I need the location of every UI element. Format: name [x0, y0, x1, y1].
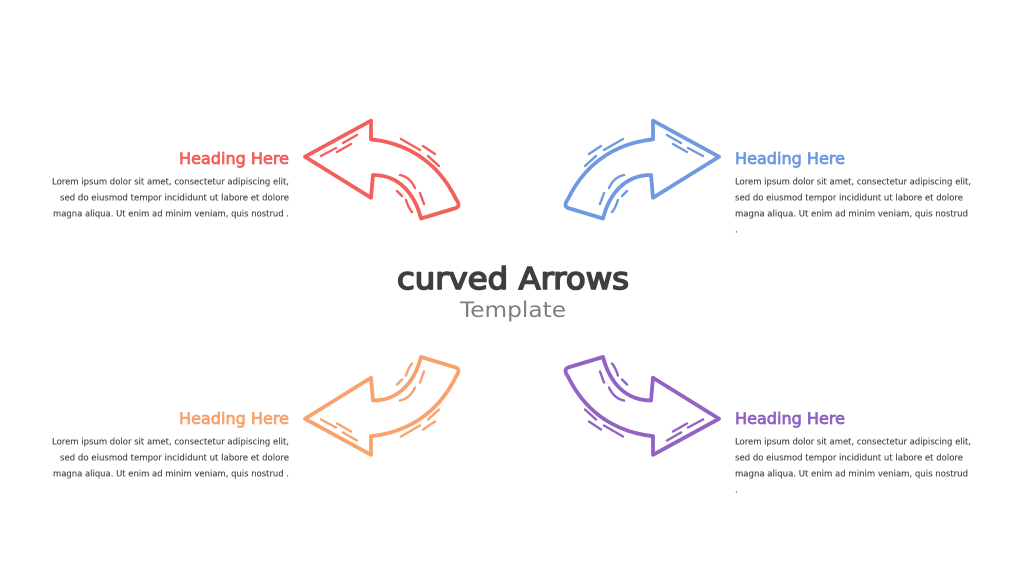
- icon: blue curved arrow pointing right: [566, 121, 719, 218]
- text block: top left: magna aliqua. Ut enim ad minim veniam, quis nostrud .: [53, 210, 289, 220]
- text block: top left: sed do eiusmod tempor incididunt ut labore et dolore: [60, 194, 289, 204]
- text block: bottom right: Lorem ipsum dolor sit amet, consectetur adipiscing elit,: [735, 438, 971, 448]
- icon: orange curved arrow pointing left: [305, 357, 458, 455]
- text block: top left: Heading Here: [179, 149, 289, 168]
- text block: bottom left: Heading Here: [179, 409, 289, 428]
- text block: bottom right: .: [735, 486, 738, 496]
- text block: top right: Heading Here: [735, 149, 845, 168]
- text block: top right: [735, 149, 971, 236]
- text block: top right: sed do eiusmod tempor incididunt ut labore et dolore: [735, 194, 963, 204]
- text block: top left: [52, 149, 289, 220]
- text block: bottom left: magna aliqua. Ut enim ad minim veniam, quis nostrud .: [53, 470, 289, 480]
- text block: top right: Lorem ipsum dolor sit amet, consectetur adipiscing elit,: [735, 178, 971, 188]
- text block: bottom left: [52, 409, 289, 480]
- text block: bottom right: sed do eiusmod tempor incididunt ut labore et dolore: [735, 454, 963, 464]
- text block: bottom right: Heading Here: [735, 409, 845, 428]
- text block: top right: .: [735, 226, 738, 236]
- text block: top right: magna aliqua. Ut enim ad minim veniam, quis nostrud: [735, 210, 968, 220]
- text block: bottom right: [735, 409, 971, 496]
- icon: red curved arrow pointing left: [305, 121, 458, 218]
- subtitle: Template: [459, 298, 566, 322]
- text block: bottom left: Lorem ipsum dolor sit amet, consectetur adipiscing elit,: [52, 438, 289, 448]
- text block: bottom right: magna aliqua. Ut enim ad minim veniam, quis nostrud: [735, 470, 968, 480]
- text block: top left: Lorem ipsum dolor sit amet, consectetur adipiscing elit,: [52, 178, 289, 188]
- text block: bottom left: sed do eiusmod tempor incididunt ut labore et dolore: [60, 454, 289, 464]
- icon: purple curved arrow pointing right: [566, 357, 719, 455]
- title: curved Arrows: [397, 262, 629, 297]
